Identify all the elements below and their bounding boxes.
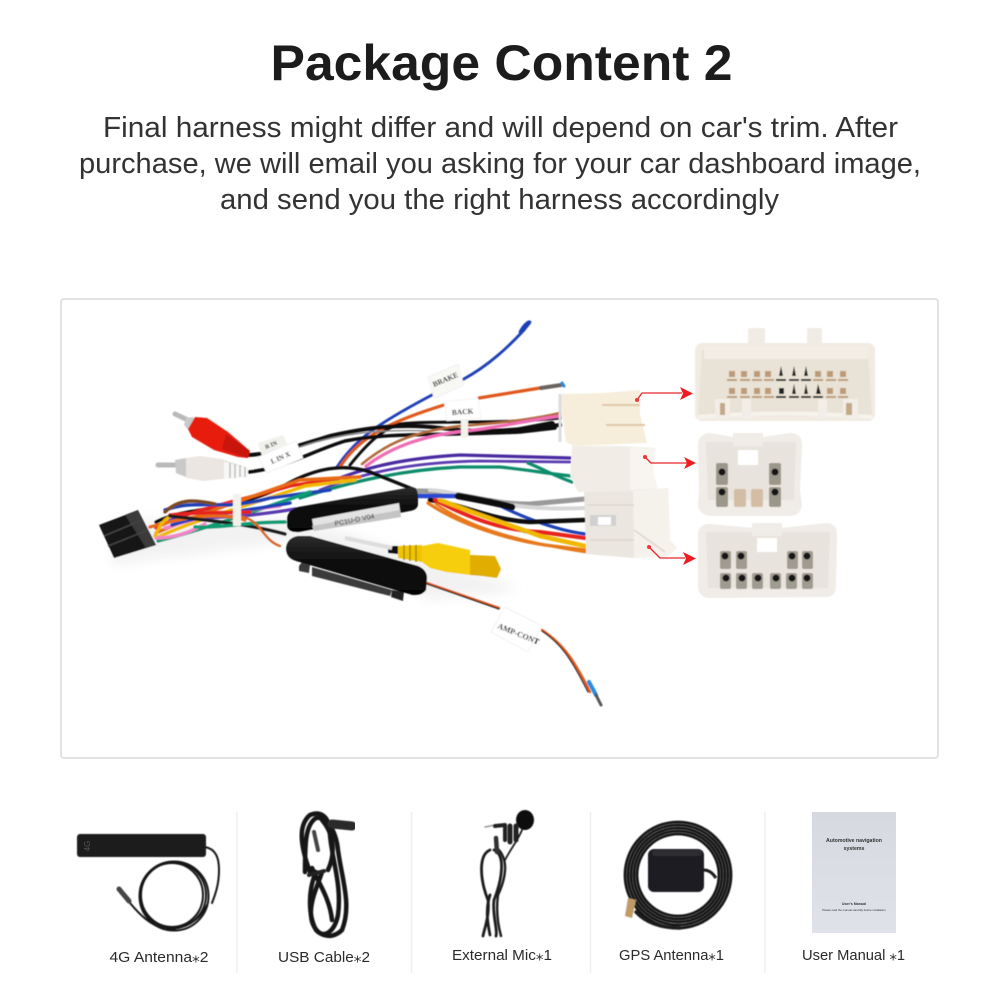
block connector	[99, 510, 156, 558]
intro text	[79, 112, 921, 216]
antenna cable	[130, 847, 219, 930]
back label: BACK	[452, 406, 474, 417]
manual booklet: Automotive navigation	[826, 838, 882, 844]
brake wire	[337, 322, 530, 467]
lower filter	[286, 536, 427, 601]
audio labels	[258, 435, 303, 473]
wiring harness	[99, 322, 601, 705]
connector face: wide	[698, 523, 837, 598]
item: 4G antenna	[77, 834, 219, 966]
upper filter	[287, 487, 418, 532]
white RCA plug	[158, 456, 248, 481]
back label	[444, 398, 481, 421]
connector 1	[560, 390, 647, 446]
item: USB cable	[278, 814, 370, 966]
manual booklet: User's Manual	[842, 902, 866, 906]
brake label: BRAKE	[431, 370, 459, 389]
audio labels: R IN	[265, 440, 279, 451]
pink and brown wires	[362, 413, 560, 464]
red RCA plug	[175, 414, 250, 458]
manual booklet	[812, 812, 896, 933]
audio labels: L IN X	[270, 450, 292, 466]
caption: USB Cable⁎2	[278, 949, 370, 966]
arrow: connector 2	[643, 455, 696, 469]
connector face: large	[695, 328, 875, 421]
lower right wires	[418, 490, 585, 552]
audio wires	[249, 418, 560, 472]
title: Package Content 2	[270, 35, 732, 91]
back wire	[340, 388, 540, 467]
harness-side connectors	[560, 390, 677, 558]
yellow RCA plug	[345, 538, 501, 578]
caption: External Mic⁎1	[452, 947, 552, 964]
purple and green wires	[330, 455, 570, 482]
connector 3	[584, 488, 677, 558]
zip tie	[233, 494, 241, 526]
item: 4G antenna: 4G	[83, 841, 92, 851]
manual booklet: Please read the manual carefully before installation	[822, 908, 886, 912]
amp-cont label	[491, 607, 542, 652]
soft shadow	[110, 520, 520, 600]
main bundle	[150, 468, 420, 541]
amp-cont label: AMP-CONT	[496, 622, 541, 647]
manual booklet: systems	[844, 846, 864, 852]
arrow: connector 3	[647, 545, 696, 565]
panel: harness photo	[61, 299, 938, 758]
intro text: Final harness might differ and will depend on car's trim. After	[103, 112, 898, 144]
item: user manual	[802, 812, 905, 964]
caption: User Manual ⁎1	[802, 947, 905, 964]
connector face: medium	[698, 433, 802, 516]
GPS plug	[625, 898, 636, 918]
caption: GPS Antenna⁎1	[619, 947, 724, 964]
item: GPS antenna	[619, 822, 731, 964]
caption: 4G Antenna⁎2	[110, 949, 208, 966]
GPS puck	[648, 849, 704, 892]
upper filter: PC1U-D V04	[334, 513, 375, 528]
arrow: connector 1	[635, 387, 693, 402]
intro text: and send you the right harness accordingly	[220, 184, 779, 216]
amp wire	[427, 583, 590, 692]
antenna body	[77, 834, 206, 857]
brake label	[428, 364, 464, 399]
item: external mic	[452, 810, 552, 964]
item dividers	[237, 812, 765, 973]
intro text: purchase, we will email you asking for your car dashboard image,	[79, 148, 921, 180]
connector 2	[570, 446, 658, 492]
